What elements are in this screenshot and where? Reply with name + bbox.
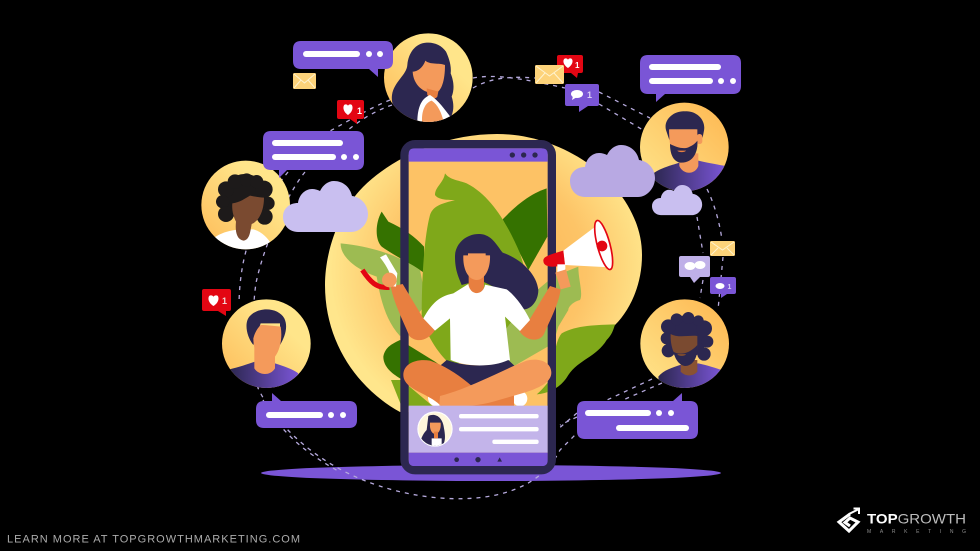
speech bubble lower left [256, 393, 357, 428]
logo tagline: MARKETING [867, 529, 966, 535]
woman shirt [423, 284, 530, 365]
like badge left [202, 289, 231, 316]
sun blob [325, 134, 642, 413]
phone with woman [341, 144, 616, 470]
cloud left [283, 181, 368, 232]
phone screen background [409, 148, 548, 466]
woman hair [455, 234, 538, 309]
avatar: man left [222, 299, 311, 393]
cloud upper right large [570, 145, 655, 197]
comment badge top right [565, 84, 599, 112]
avatar: woman with afro [201, 161, 290, 257]
footer call to action: LEARN MORE AT TOPGROWTHMARKETING.COM [7, 534, 300, 546]
comment badge top right: 1 [587, 90, 592, 100]
like badge upper left: 1 [357, 106, 362, 116]
woman shoes [428, 390, 445, 406]
woman face [463, 253, 490, 280]
envelope top right [535, 65, 564, 84]
megaphone [543, 219, 616, 289]
woman shorts [420, 360, 537, 393]
leaves [341, 173, 615, 407]
dashed network orbit [239, 76, 723, 499]
avatar: man with curly hair and beard [640, 299, 729, 393]
ground ellipse [261, 465, 721, 481]
woman back leg [403, 360, 514, 407]
comment badge small: 1 [728, 284, 732, 291]
phone frame [404, 144, 552, 470]
phone profile panel [409, 406, 548, 453]
woman neck [469, 275, 484, 293]
speech bubble upper left [263, 131, 364, 178]
avatar: woman with long hair [384, 33, 473, 125]
speech bubble upper right [640, 55, 741, 102]
envelope top left [293, 73, 316, 89]
woman arms [391, 284, 435, 340]
speech bubble top [293, 41, 393, 77]
logo wordmark: TOPGROWTH [867, 510, 966, 526]
comment badge lilac [679, 256, 710, 283]
logo [839, 508, 966, 535]
like badge left: 1 [222, 296, 227, 306]
like badge top right [557, 55, 583, 78]
phone bottom bar [409, 453, 548, 466]
speech bubble lower right [577, 393, 698, 439]
woman front leg [439, 360, 551, 407]
mini avatar [417, 411, 453, 447]
phone top bar [409, 148, 548, 162]
logo icon [839, 508, 859, 531]
magnet [362, 254, 397, 287]
comment badge small [710, 277, 736, 298]
envelope right [710, 241, 735, 256]
cloud upper right small [652, 185, 702, 215]
avatar: bearded man top right [640, 103, 729, 197]
woman [391, 234, 561, 407]
like badge upper left [337, 100, 364, 124]
like badge top right: 1 [575, 61, 580, 70]
